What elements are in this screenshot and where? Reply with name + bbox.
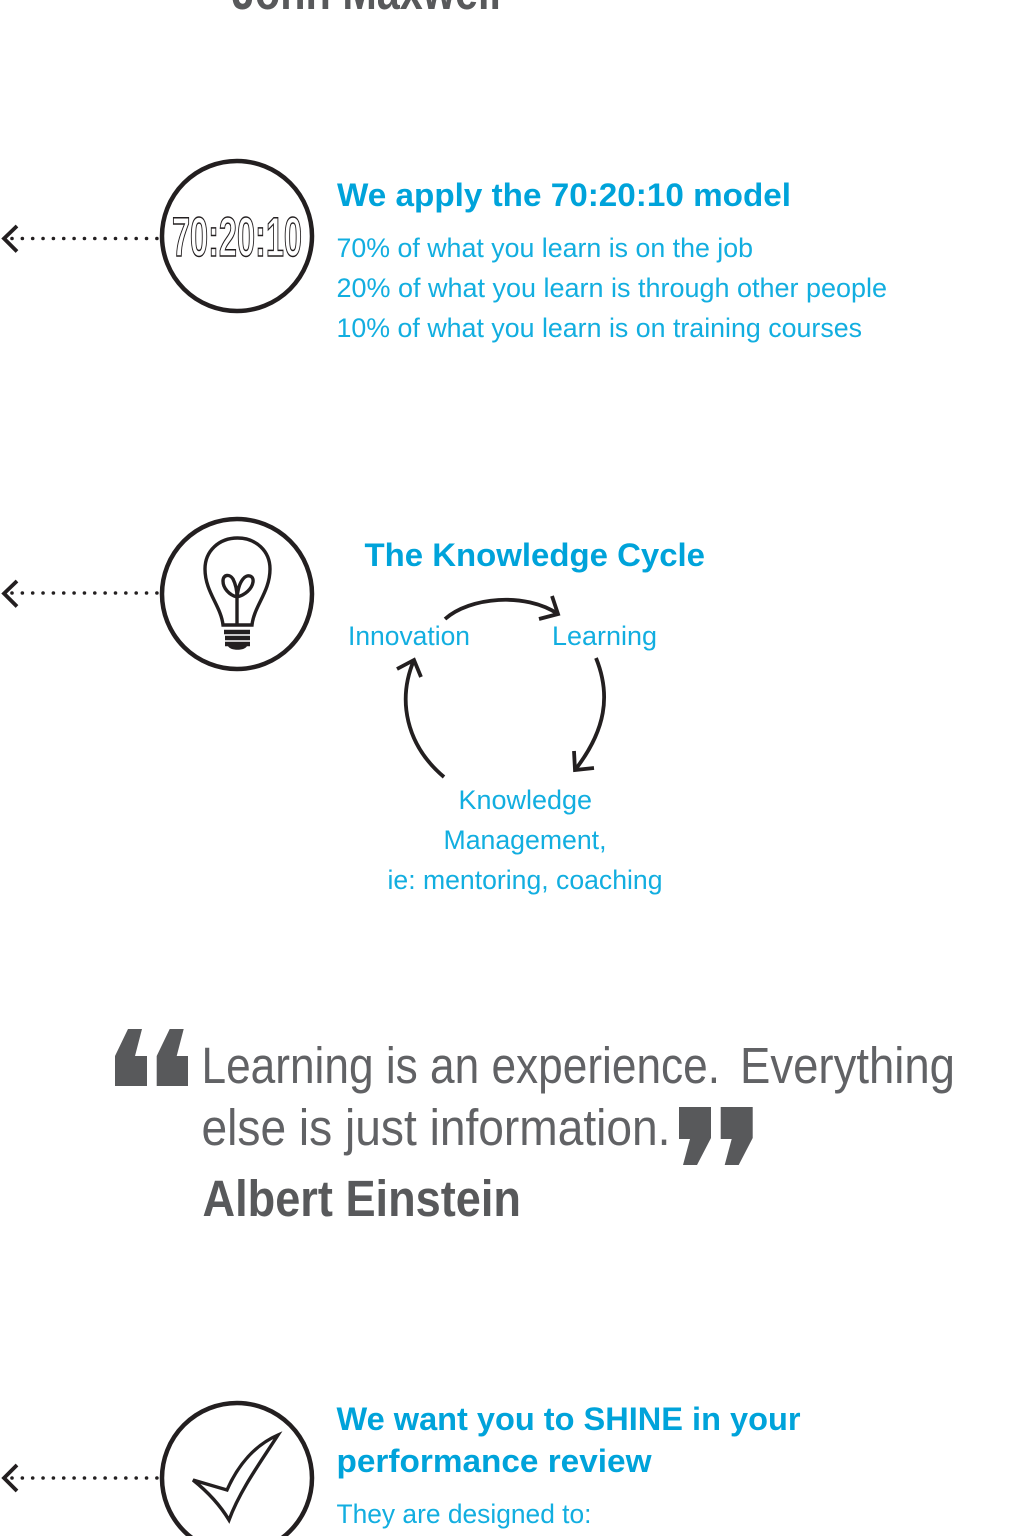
section: knowledge cycle xyxy=(4,519,705,895)
icon: 70:20:10 circle xyxy=(162,161,312,311)
label: knowledge management: Knowledge xyxy=(458,785,592,815)
quote attribution: Albert Einstein xyxy=(202,1170,521,1227)
heading: knowledge cycle: The Knowledge Cycle xyxy=(364,537,705,573)
icon: 70:20:10 circle: 70:20:10 xyxy=(172,205,302,268)
icon: closing quotation mark xyxy=(679,1107,753,1165)
text block: 70:20:10 breakdown: 10% of what you learn is on training courses xyxy=(336,313,862,343)
icon: check mark xyxy=(162,1403,312,1536)
arrow: innovation to learning xyxy=(445,596,558,619)
dotted arrow: performance review xyxy=(4,1465,160,1491)
quote text xyxy=(202,1037,955,1156)
section: performance review xyxy=(4,1401,800,1536)
dotted arrow: 70:20:10 xyxy=(4,226,160,252)
text block: 70:20:10 breakdown: 70% of what you learn is on the job xyxy=(336,233,753,263)
icon: light bulb xyxy=(162,519,312,669)
heading: performance review: We want you to SHINE in your xyxy=(336,1401,800,1437)
quote text: Learning is an experience. xyxy=(202,1037,720,1094)
arrow: learning to knowledge management xyxy=(574,658,604,770)
dotted arrow: knowledge cycle xyxy=(4,581,160,606)
heading: 70:20:10 model: We apply the 70:20:10 model xyxy=(337,177,791,213)
quote text: Everything xyxy=(740,1037,955,1094)
arrow: knowledge management to innovation xyxy=(397,660,444,777)
diagram: knowledge cycle xyxy=(348,596,662,895)
heading: performance review: performance review xyxy=(336,1443,652,1479)
text block: 70:20:10 breakdown xyxy=(336,233,887,343)
text block: performance review intro: They are designed to: xyxy=(336,1499,592,1529)
section: 70:20:10 model xyxy=(4,161,887,343)
icon: opening quotation mark xyxy=(115,1029,188,1086)
quote: Albert Einstein xyxy=(115,1029,955,1227)
label: knowledge management: Management, xyxy=(444,825,606,855)
label: knowledge management: ie: mentoring, coaching xyxy=(388,865,662,895)
heading: performance review xyxy=(336,1401,800,1479)
label: knowledge management xyxy=(388,785,662,895)
text block: 70:20:10 breakdown: 20% of what you learn is through other people xyxy=(336,273,887,303)
quote text: else is just information. xyxy=(202,1099,670,1156)
label: learning: Learning xyxy=(552,621,657,651)
label: innovation: Innovation xyxy=(348,621,470,651)
